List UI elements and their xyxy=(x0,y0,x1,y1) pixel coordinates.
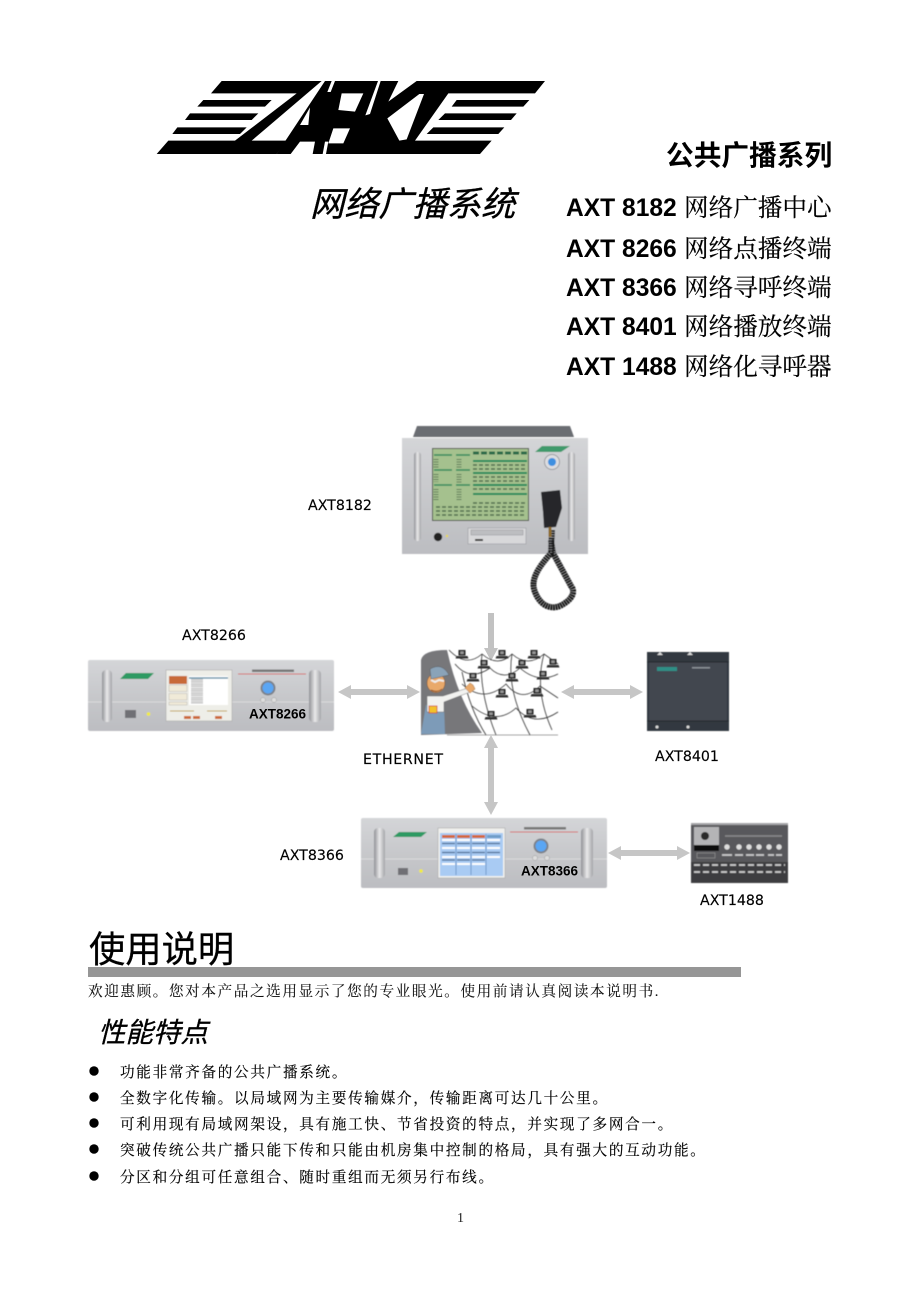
model text: AXT8266: AXT8266 xyxy=(249,706,307,722)
arrow: AXT8182 to ethernet xyxy=(484,613,498,661)
product list: 网络点播终端 xyxy=(684,230,832,265)
page number: 1 xyxy=(457,1211,464,1226)
feature list: 可利用现有局域网架设，具有施工快、节省投资的特点，并实现了多网合一。 xyxy=(120,1113,674,1134)
arrow: ethernet to AXT8401 xyxy=(561,685,643,699)
divider bar xyxy=(88,967,741,977)
feature list: 突破传统公共广播只能下传和只能由机房集中控制的格局，具有强大的互动功能。 xyxy=(120,1139,707,1160)
product list: AXT 1488 xyxy=(566,354,677,381)
logo: ABK xyxy=(157,81,545,154)
arrow: AXT8366 to AXT1488 xyxy=(608,846,690,860)
product list: 网络寻呼终端 xyxy=(684,269,832,304)
device: AXT1488 paging microphone xyxy=(691,823,788,883)
heading: instructions: 使用说明 xyxy=(89,921,234,973)
feature list: 分区和分组可任意组合、随时重组而无须另行布线。 xyxy=(120,1166,495,1187)
product list: AXT 8182 xyxy=(566,195,677,222)
product list: 网络化寻呼器 xyxy=(684,348,832,383)
arrow: ethernet to AXT8366 xyxy=(484,735,498,815)
arrow: AXT8266 to ethernet xyxy=(338,685,420,699)
heading: features: 性能特点 xyxy=(98,1010,211,1050)
label: AXT8366: AXT8366 xyxy=(280,848,344,864)
intro text: 欢迎惠顾。您对本产品之选用显示了您的专业眼光。使用前请认真阅读本说明书. xyxy=(88,982,660,1000)
device: AXT8366 paging terminal xyxy=(361,818,607,888)
device: AXT8182 control centre xyxy=(402,426,588,607)
feature list: 功能非常齐备的公共广播系统。 xyxy=(120,1061,348,1082)
label: AXT8266: AXT8266 xyxy=(182,628,246,644)
product list: AXT 8266 xyxy=(566,236,677,263)
label: AXT8182: AXT8182 xyxy=(308,498,372,514)
product list: 网络播放终端 xyxy=(684,308,832,343)
heading: network broadcast system: 网络广播系统 xyxy=(310,176,520,226)
device: AXT8266 on-demand terminal xyxy=(88,660,334,731)
label: ETHERNET: ETHERNET xyxy=(363,752,443,768)
product list xyxy=(566,189,833,383)
feature list xyxy=(89,1061,707,1187)
heading: series: 公共广播系列 xyxy=(666,140,832,171)
illustration: technician and ethernet network xyxy=(421,650,560,735)
label: AXT8401: AXT8401 xyxy=(655,749,719,765)
product list: AXT 8366 xyxy=(566,275,677,302)
product list: AXT 8401 xyxy=(566,314,677,341)
device: AXT8401 player terminal xyxy=(647,652,729,731)
feature list: 全数字化传输。以局域网为主要传输媒介，传输距离可达几十公里。 xyxy=(120,1087,609,1108)
model text: AXT8366: AXT8366 xyxy=(521,864,579,878)
product list: 网络广播中心 xyxy=(684,189,833,224)
label: AXT1488: AXT1488 xyxy=(700,893,764,909)
